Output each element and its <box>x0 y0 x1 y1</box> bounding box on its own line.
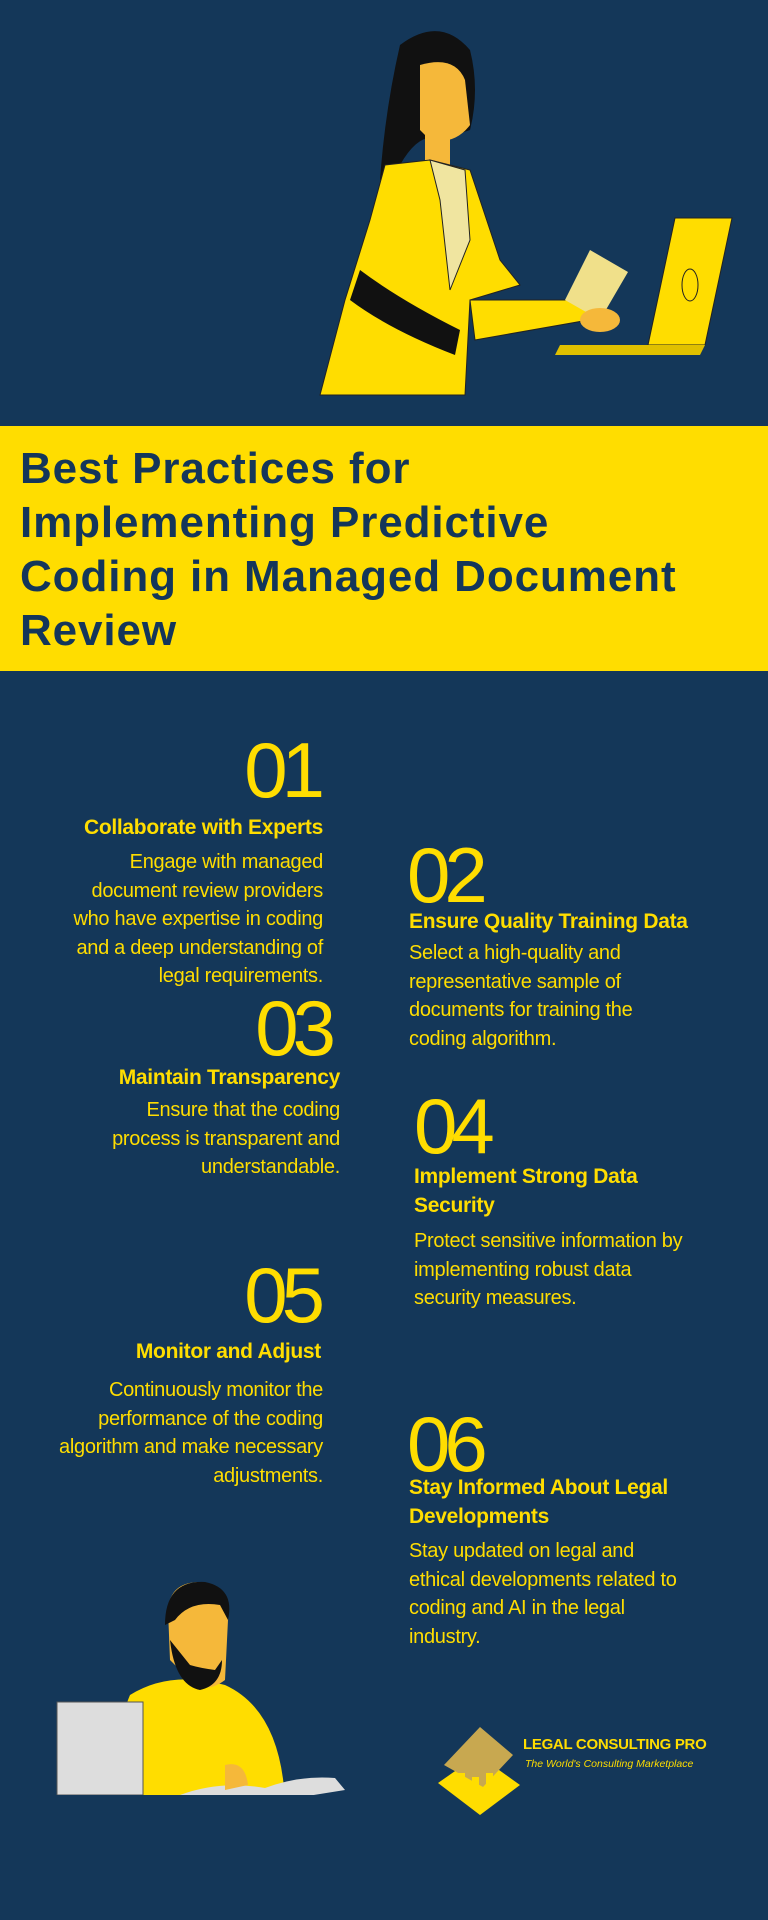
heading <box>414 1165 638 1217</box>
body: Engage with managed <box>130 851 323 873</box>
body: Ensure that the coding <box>146 1099 340 1121</box>
body: ethical developments related to <box>409 1568 677 1590</box>
heading: Ensure Quality Training Data <box>409 910 688 933</box>
body <box>73 851 324 987</box>
title <box>20 444 677 655</box>
body: process is transparent and <box>112 1128 340 1150</box>
body: legal requirements. <box>159 965 323 987</box>
title: Best Practices for <box>20 444 410 493</box>
number 01: 01 <box>244 726 319 814</box>
body <box>115 1679 285 1800</box>
heading: Maintain Transparency <box>119 1066 340 1089</box>
body: and a deep understanding of <box>76 936 323 958</box>
body: security measures. <box>414 1287 576 1309</box>
shirt <box>430 160 470 290</box>
laptop base <box>555 345 705 355</box>
number 04: 04 <box>414 1082 489 1170</box>
step 06 <box>407 1400 677 1648</box>
heading: Stay Informed About Legal <box>409 1476 668 1499</box>
tagline: The World's Consulting Marketplace <box>525 1758 693 1770</box>
laptop screen <box>648 218 732 345</box>
hair <box>380 31 475 180</box>
hair <box>165 1582 229 1625</box>
step 02 <box>407 831 688 1050</box>
face <box>420 62 470 141</box>
body <box>112 1099 340 1178</box>
number 06: 06 <box>407 1400 482 1488</box>
heading <box>409 1476 668 1528</box>
body: documents for training the <box>409 999 632 1021</box>
body: coding algorithm. <box>409 1028 556 1050</box>
head <box>168 1582 228 1688</box>
dark sleeve shadow <box>350 270 460 355</box>
heading: Developments <box>409 1505 549 1528</box>
open book <box>180 1777 345 1808</box>
hand <box>225 1764 248 1790</box>
beard <box>170 1640 222 1690</box>
body <box>409 1540 677 1648</box>
paper stack <box>57 1702 143 1795</box>
body: representative sample of <box>409 970 621 992</box>
heading: Monitor and Adjust <box>136 1340 321 1363</box>
body: Select a high-quality and <box>409 942 621 964</box>
heading: Security <box>414 1194 494 1217</box>
number 03: 03 <box>255 984 330 1072</box>
body <box>59 1379 324 1486</box>
body: Continuously monitor the <box>109 1379 323 1401</box>
title: Coding in Managed Document <box>20 552 677 601</box>
body: who have expertise in coding <box>73 908 323 930</box>
brand name: LEGAL CONSULTING PRO <box>523 1736 706 1753</box>
step 05 <box>59 1251 324 1486</box>
title: Implementing Predictive <box>20 498 549 547</box>
body: performance of the coding <box>98 1408 323 1430</box>
body: document review providers <box>92 880 323 902</box>
illustration: woman with laptop <box>319 31 732 396</box>
body: algorithm and make necessary <box>59 1436 323 1458</box>
step 03 <box>112 984 340 1178</box>
body: understandable. <box>201 1156 340 1178</box>
illustration: bearded man reading <box>56 1582 345 1795</box>
body: coding and AI in the legal <box>409 1597 625 1619</box>
title: Review <box>20 606 177 655</box>
body: industry. <box>409 1626 480 1648</box>
number 02: 02 <box>407 831 482 919</box>
neck <box>425 135 450 165</box>
heading: Collaborate with Experts <box>84 816 323 839</box>
logo <box>438 1727 706 1815</box>
paper <box>565 250 628 320</box>
arm <box>470 300 600 340</box>
title banner <box>0 426 768 671</box>
body: Stay updated on legal and <box>409 1540 634 1562</box>
body: Protect sensitive information by <box>414 1230 682 1252</box>
body: implementing robust data <box>414 1258 631 1280</box>
hand <box>580 308 620 332</box>
step 01 <box>73 726 324 987</box>
body <box>409 942 632 1050</box>
number 05: 05 <box>244 1251 319 1339</box>
step 04 <box>414 1082 683 1309</box>
icon: courthouse <box>438 1727 520 1815</box>
heading: Implement Strong Data <box>414 1165 638 1188</box>
jacket body <box>320 160 520 395</box>
body: adjustments. <box>213 1464 323 1486</box>
body <box>414 1230 683 1309</box>
